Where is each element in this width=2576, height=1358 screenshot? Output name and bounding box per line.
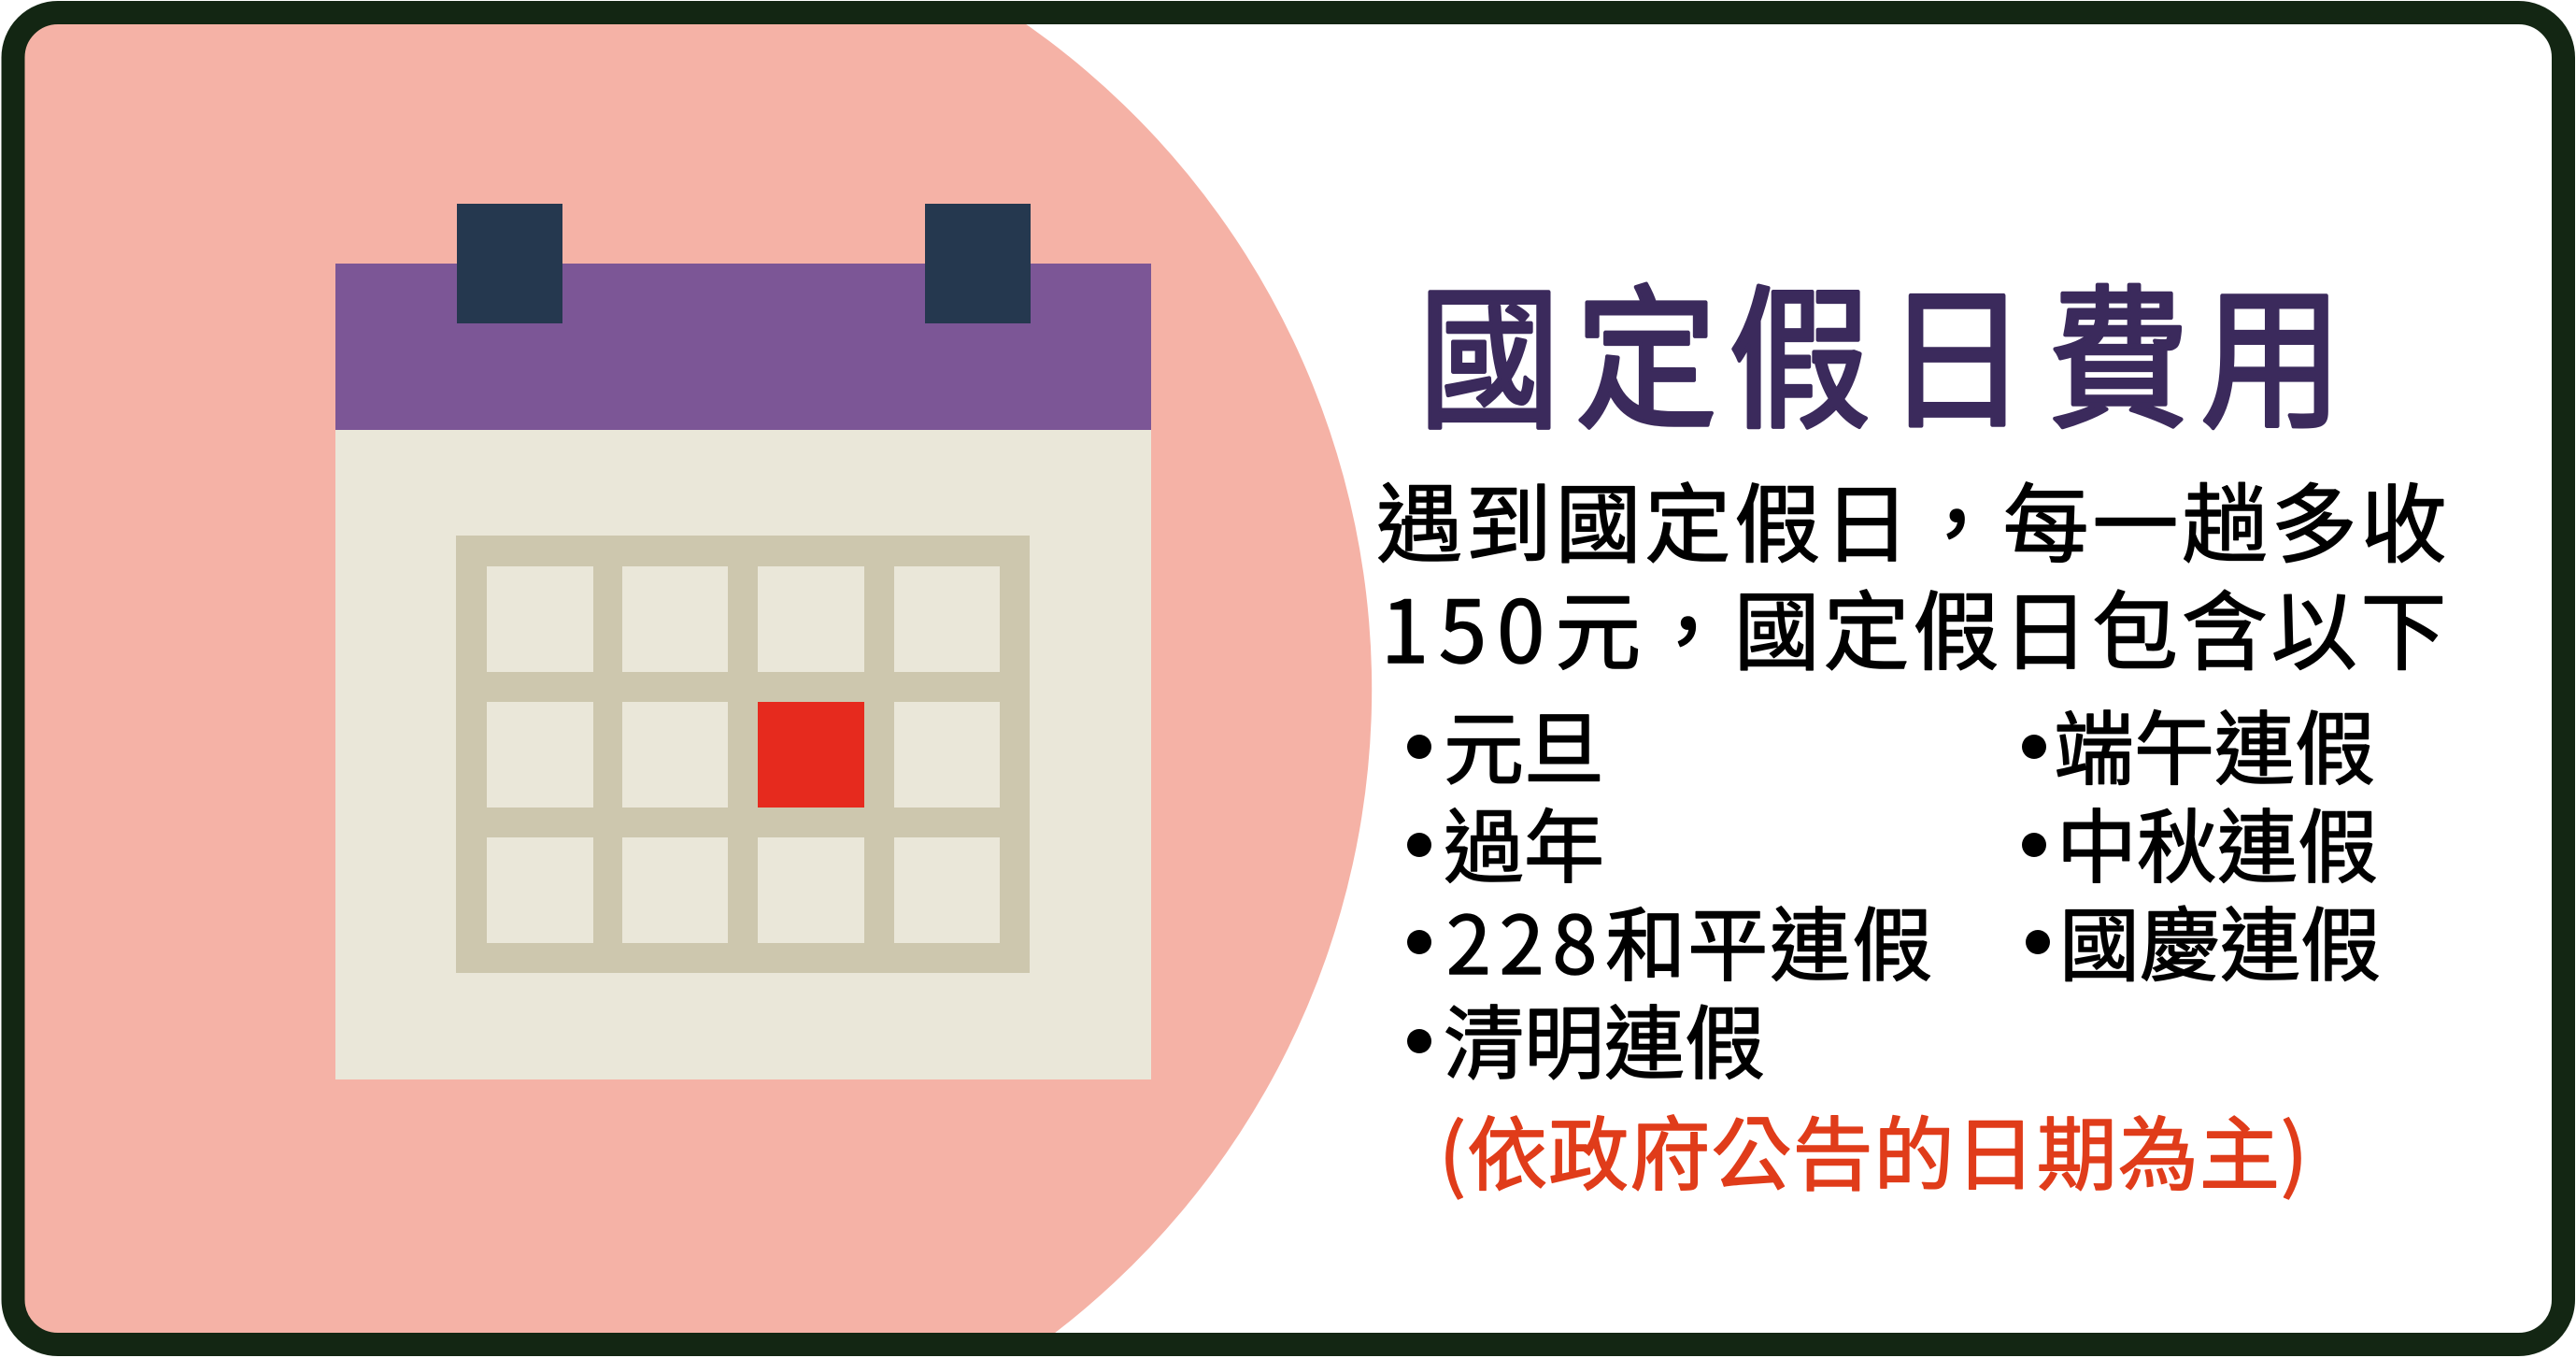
text block: intro line 1: 遇到國定假日，每一趟多收 (1376, 456, 2451, 580)
list item: Lunar New Year: 過年 (1444, 782, 1604, 899)
list item: Dragon Boat holiday: 端午連假 (2054, 684, 2375, 801)
text block: intro line 2: 150元，國定假日包含以下 (1381, 564, 2450, 688)
date grid (456, 536, 1030, 973)
note: dates per government announcement: (依政府公告的日期為主) (1439, 1090, 2308, 1207)
left binder tab (457, 204, 562, 323)
list item: Mid-Autumn holiday: 中秋連假 (2057, 782, 2378, 899)
icon: calendar (335, 204, 1151, 1079)
list item: Qingming holiday: 清明連假 (1444, 979, 1765, 1095)
calendar page (335, 430, 1151, 1079)
highlighted holiday date (758, 702, 864, 808)
pink circle background (13, 13, 1372, 1344)
right binder tab (925, 204, 1031, 323)
title: 國定假日費用 (1418, 236, 2342, 460)
list: holidays right column (2022, 684, 2381, 997)
list item: New Year: 元旦 (1444, 684, 1604, 801)
list: holidays left column (1407, 684, 1934, 1095)
calendar header band (335, 264, 1151, 430)
list item: National Day holiday: 國慶連假 (2059, 880, 2381, 997)
list item: 228 Peace holiday: 228和平連假 (1446, 880, 1934, 997)
